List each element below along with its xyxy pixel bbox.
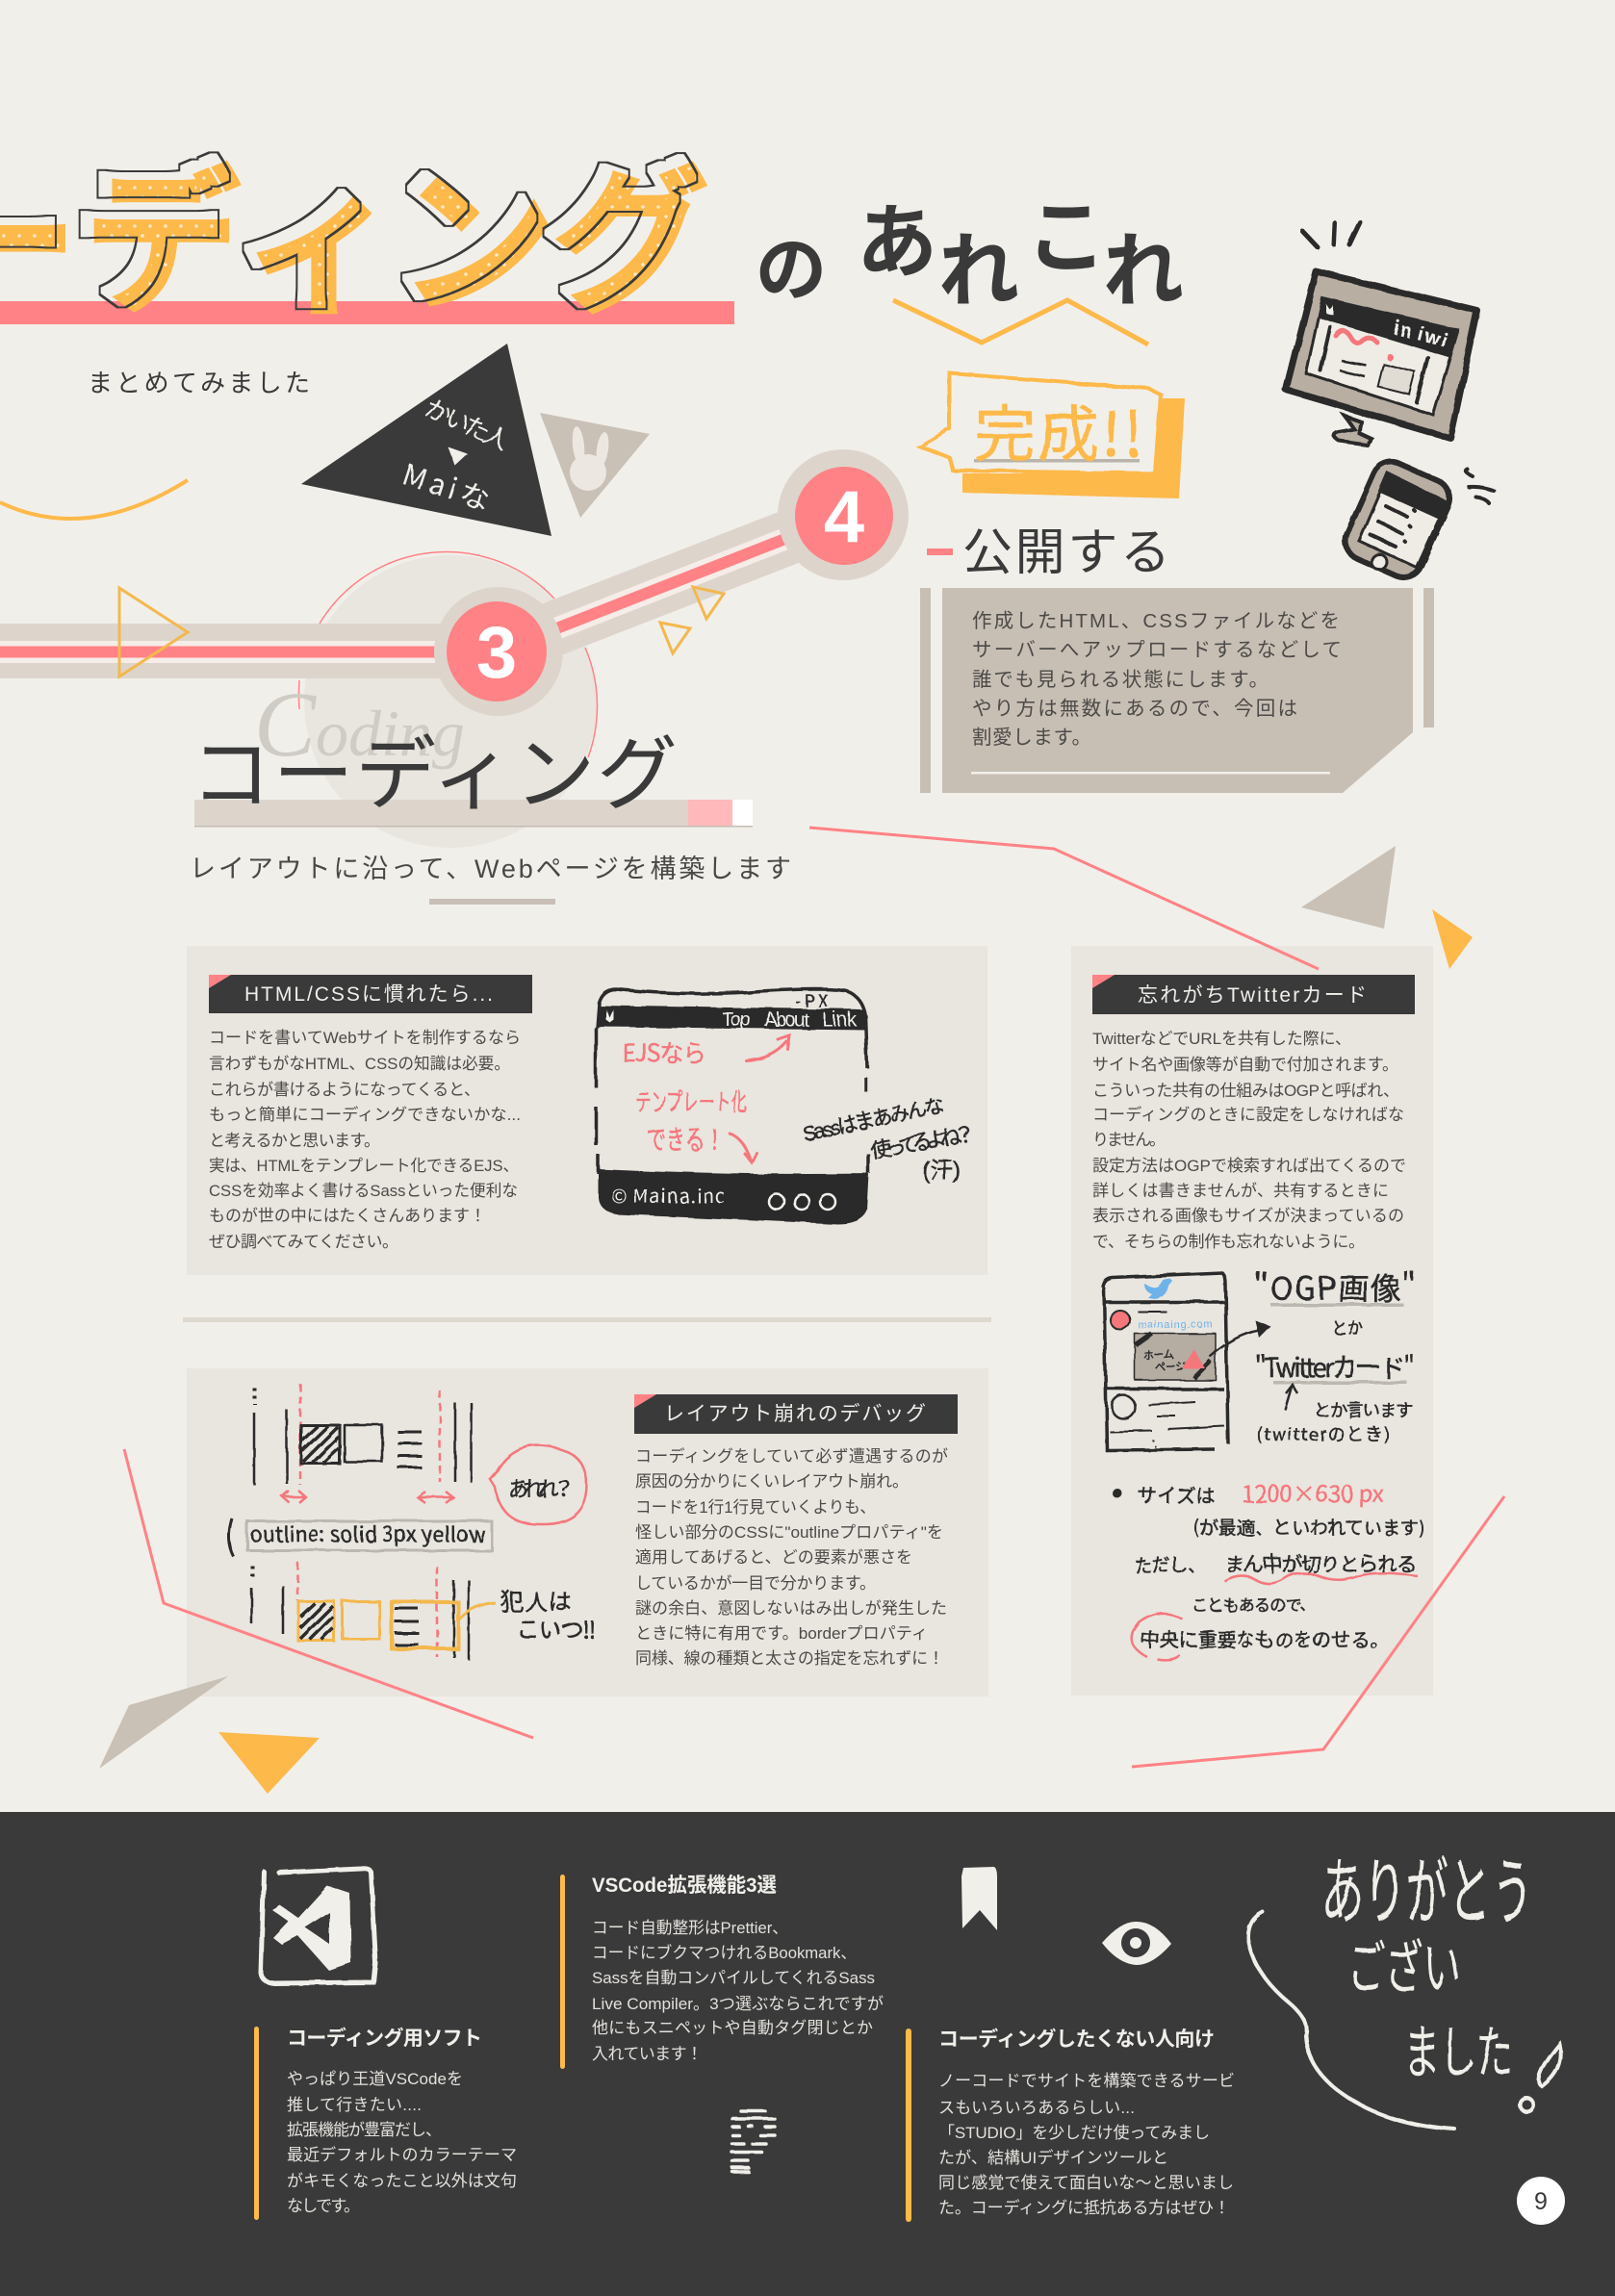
body — [938, 2072, 1235, 2217]
body text: しているかが一目で分かります。 — [635, 1574, 876, 1593]
author text: かいた人 — [421, 390, 516, 458]
card image label 2: ページ — [1155, 1359, 1187, 1374]
body — [287, 2070, 517, 2215]
body: やっぱり王道VSCodeを — [287, 2070, 463, 2088]
body: がキモくなったこと以外は文句 — [287, 2172, 517, 2190]
body text — [1092, 1030, 1406, 1251]
author text: Maiな — [397, 451, 496, 519]
are kore letters: あれこれ — [857, 173, 1184, 323]
empty block highlighted — [343, 1601, 379, 1639]
page number badge — [1517, 2177, 1565, 2225]
bottom guides — [250, 1566, 254, 1581]
outline code text: outline: solid 3px yellow — [250, 1519, 485, 1548]
cropped text: まん中が切りとられる — [1224, 1549, 1417, 1578]
card image mountain — [1182, 1349, 1205, 1368]
Coding script watermark: Coding — [254, 673, 465, 776]
wireframe nav: About — [764, 1009, 808, 1031]
body text: これらが書けるようになってくると、 — [209, 1081, 480, 1099]
body text: 同様、線の種類と太さの指定を忘れずに！ — [635, 1649, 944, 1668]
panel text: サーバーへアップロードするなどして — [972, 639, 1342, 661]
avatar — [1111, 1311, 1130, 1330]
wireframe window controls: - P X — [795, 987, 828, 1011]
note: sass: 使ってるよね？ — [869, 1121, 977, 1163]
body text: ときに特に有用です。borderプロパティ — [635, 1624, 928, 1643]
bottom pink guides — [297, 1562, 437, 1657]
header text: 忘れがちTwitterカード — [1138, 984, 1367, 1007]
however: ただし、 — [1134, 1551, 1206, 1577]
body text: と考えるかと思います。 — [209, 1132, 380, 1150]
bubble underline — [974, 459, 1140, 462]
panel text: やり方は無数にあるので、今回は — [972, 698, 1297, 720]
body text: こういった共有の仕組みはOGPと呼ばれ、 — [1092, 1082, 1399, 1100]
arrow to OGP — [1210, 1330, 1263, 1357]
sketch: twitter card — [1103, 1264, 1424, 1660]
user icon — [1112, 1395, 1135, 1418]
hatched block highlighted — [298, 1601, 334, 1641]
body: ノーコードでサイトを構築できるサービ — [938, 2072, 1235, 2090]
orange triangle top — [1432, 909, 1473, 969]
question bubble — [490, 1445, 587, 1524]
question text: あれれ？ — [507, 1472, 575, 1503]
culprit connector — [458, 1603, 496, 1620]
body text — [209, 1029, 521, 1251]
header corner — [209, 975, 231, 988]
body text: 適用してあげると、どの要素が悪さを — [635, 1548, 912, 1567]
sketch: web page wireframe — [596, 987, 977, 1224]
body text: コーディングのときに設定をしなければな — [1092, 1105, 1404, 1124]
phone screen — [1359, 473, 1447, 568]
accent bar — [560, 1875, 565, 2069]
monitor frame — [1286, 271, 1477, 438]
small underline — [429, 899, 555, 905]
dark triangle — [301, 344, 551, 536]
panel text: 作成したHTML、CSSファイルなどを — [972, 610, 1340, 632]
wireframe copyright: © Maina.inc — [611, 1181, 725, 1209]
accent bar — [254, 2027, 259, 2220]
main title: coding — [0, 111, 708, 344]
heading: コーディング用ソフト — [287, 2027, 482, 2050]
icon logo — [272, 1886, 351, 1971]
card frame — [1103, 1273, 1228, 1450]
OGP underline — [1270, 1303, 1403, 1307]
phone text lines — [1371, 506, 1415, 547]
culprit text: 犯人は — [500, 1583, 572, 1617]
twitter card underline — [1273, 1381, 1407, 1384]
panel header bar — [634, 1394, 958, 1434]
body text — [635, 1446, 948, 1668]
top layout guides — [254, 1389, 472, 1485]
body: た。コーディングに抵抗ある方はぜひ！ — [938, 2198, 1230, 2217]
name dash — [1138, 1311, 1166, 1313]
step 3 node — [434, 587, 563, 716]
body text: サイト名や画像等が自動で付加されます。 — [1092, 1056, 1398, 1074]
page number: 9 — [1534, 2188, 1548, 2215]
grey triangle bottom — [99, 1676, 228, 1769]
phone body — [1340, 456, 1455, 583]
panel background — [187, 946, 987, 1275]
twitter bird — [1144, 1279, 1172, 1299]
body text: コードを1行1行見ていくよりも、 — [635, 1498, 876, 1517]
orange triangle bottom — [218, 1732, 320, 1794]
body text: 言わずもがなHTML、CSSの知識は必要。 — [209, 1055, 510, 1073]
step 3 description: レイアウトに沿って、Webページを構築します — [190, 855, 791, 883]
monitor nav text: in iwi — [1392, 315, 1449, 352]
divider — [183, 1317, 991, 1322]
author text — [397, 390, 516, 519]
header text: レイアウト崩れのデバッグ — [664, 1403, 926, 1425]
bubble text: 完成!! — [974, 386, 1143, 474]
note: EJS: EJSなら — [622, 1034, 706, 1069]
pink ring — [1132, 1614, 1182, 1660]
note: sass: Sassはまあみんな — [801, 1094, 947, 1146]
card image corners — [1136, 1334, 1211, 1378]
panel text — [972, 610, 1342, 749]
panel: twitter card — [1071, 946, 1433, 1696]
tweet lines — [1110, 1402, 1224, 1447]
twitter card label: "Twitterカード" — [1254, 1347, 1415, 1385]
monitor attention ticks — [1303, 222, 1360, 247]
sketch: smartphone — [1340, 456, 1494, 583]
monitor bunny — [1326, 304, 1334, 316]
size value: 1200×630 px — [1242, 1475, 1384, 1509]
OGP label: "OGP画像" — [1254, 1264, 1417, 1309]
heading: coding: コーディング — [191, 729, 678, 820]
body: Sassを自動コンパイルしてくれるSass — [592, 1969, 875, 1987]
thanks dot — [1520, 2098, 1533, 2111]
icon: eye — [1102, 1922, 1171, 1965]
sketch: layout debugging — [229, 1384, 596, 1660]
thanks line 3: ました — [1403, 2006, 1513, 2090]
icon: bookmark — [961, 1867, 997, 1930]
header corner — [634, 1394, 656, 1408]
panel text: 誰でも見られる状態にします。 — [972, 669, 1269, 691]
hatched block — [301, 1425, 340, 1464]
monitor dot — [1386, 354, 1394, 360]
bracket arrow — [229, 1518, 234, 1557]
phone ticks — [1466, 470, 1494, 504]
author triangle — [301, 344, 551, 536]
pink arcs — [298, 552, 597, 757]
sketch: desktop monitor — [1286, 222, 1477, 445]
body text: TwitterなどでURLを共有した際に、 — [1092, 1030, 1351, 1048]
top pink guides — [300, 1384, 440, 1485]
accent bar — [906, 2028, 911, 2222]
monitor text lines — [1340, 361, 1367, 376]
grey triangle — [540, 413, 650, 518]
says label: とか言います — [1314, 1397, 1413, 1422]
optimal note: (が最適、といわれています) — [1193, 1514, 1424, 1540]
step 4 heading: 公開する — [962, 525, 1170, 581]
bubble shadow — [962, 398, 1185, 498]
block: vscode extensions — [560, 1875, 884, 2069]
note text: こともあるので、 — [1192, 1592, 1317, 1616]
body text: 謎の余白、意図しないはみ出しが発生した — [635, 1599, 947, 1618]
panel right strip — [1423, 588, 1434, 727]
icon: prettier lines — [732, 2111, 775, 2172]
panel header bar — [209, 975, 532, 1013]
body text: もっと簡単にコーディングできないかな... — [209, 1105, 521, 1124]
outline code box — [247, 1521, 492, 1550]
body: 「STUDIO」を少しだけ使ってみまし — [938, 2123, 1210, 2142]
thanks exclamation — [1539, 2044, 1560, 2086]
icon: vscode — [261, 1869, 375, 1983]
body text: コードを書いてWebサイトを制作するなら — [209, 1029, 521, 1047]
body: Live Compiler。3つ選ぶならこれですが — [592, 1995, 884, 2013]
body text: りません。 — [1092, 1131, 1166, 1149]
margin arrows — [282, 1491, 453, 1503]
link text: mainaing.com — [1138, 1319, 1213, 1331]
body text: ものが世の中にはたくさんあります！ — [209, 1207, 486, 1225]
body text: CSSを効率よく書けるSassといった便利な — [209, 1182, 518, 1200]
heading: VSCode拡張機能3選 — [592, 1875, 777, 1897]
body: 入れています！ — [592, 2045, 703, 2063]
handwritten thanks — [1248, 1833, 1560, 2130]
bunny triangle — [540, 413, 650, 518]
bullet — [1113, 1489, 1122, 1498]
panel body — [942, 588, 1413, 793]
panel: html css — [187, 946, 987, 1275]
body text: 表示される画像もサイズが決まっているの — [1092, 1207, 1404, 1225]
body: コード自動整形はPrettier、 — [592, 1919, 788, 1937]
block: coding software — [254, 2027, 517, 2220]
thanks bracket curve — [1248, 1912, 1455, 2130]
arrow head — [1255, 1320, 1270, 1338]
small outlined triangle 2 — [660, 623, 690, 653]
wireframe outline — [596, 989, 869, 1174]
step 4 description panel — [920, 588, 1434, 793]
body: 推して行きたい.... — [287, 2096, 422, 2114]
wavy underline — [1225, 1572, 1418, 1584]
body text: ぜひ調べてみてください。 — [209, 1233, 398, 1251]
panel left strip — [920, 588, 931, 793]
wireframe bunny — [606, 1009, 614, 1023]
body: 拡張機能が豊富だし、 — [287, 2121, 442, 2139]
decorative line lower left — [124, 1449, 533, 1738]
grey triangle top — [1301, 846, 1396, 929]
body text: 詳しくは書きませんが、共有するときに — [1092, 1182, 1389, 1200]
icon: bunny — [570, 425, 610, 491]
panel rule — [971, 772, 1330, 774]
culprit block — [392, 1602, 458, 1648]
step number 4: 4 — [824, 476, 864, 558]
panel background — [187, 1368, 988, 1696]
orange arc — [0, 480, 188, 519]
thanks line 2: ござい — [1347, 1922, 1461, 2005]
empty block — [345, 1425, 382, 1462]
bubble outline — [920, 373, 1161, 473]
center text: 中央に重要なものをのせる。 — [1141, 1624, 1389, 1652]
card image — [1135, 1334, 1216, 1380]
pale circle behind step 3 — [298, 552, 597, 848]
title continuation: no arekore — [756, 173, 1184, 323]
decorative line top right — [809, 828, 1319, 969]
arrow to header — [746, 1035, 789, 1060]
body: 最近デフォルトのカラーテーマ — [287, 2145, 517, 2164]
block: no-code — [906, 2028, 1235, 2222]
subtitle: matomete mimashita: まとめてみました — [88, 369, 310, 397]
body text: 原因の分かりにくいレイアウト崩れ。 — [635, 1472, 909, 1491]
footer background — [0, 1812, 1615, 2296]
monitor stand — [1334, 416, 1371, 445]
card image label: ホーム — [1143, 1347, 1175, 1363]
heading underline bar — [194, 800, 753, 828]
particle no: の — [756, 213, 827, 316]
monitor screen — [1306, 298, 1458, 415]
wireframe nav: Top — [722, 1009, 751, 1031]
heading: コーディングしたくない人向け — [938, 2028, 1215, 2051]
culprit text 2: こいつ!! — [517, 1611, 596, 1645]
step 4 dash — [927, 548, 953, 555]
panel text: 割愛します。 — [972, 727, 1091, 749]
panel background — [1071, 946, 1433, 1696]
size label: サイズは — [1138, 1480, 1215, 1508]
wireframe nav: Link — [822, 1009, 858, 1031]
body text: で、そちらの制作も忘れないように。 — [1092, 1233, 1365, 1251]
panel: layout debug — [187, 1368, 988, 1696]
step line: horizontal band and diagonal band — [0, 516, 844, 652]
step number 3: 3 — [476, 612, 517, 694]
bottom layout lines — [251, 1580, 469, 1660]
body text: 怪しい部分のCSSに"outlineプロパティ"を — [635, 1523, 943, 1542]
small outlined triangle 1 — [693, 587, 724, 619]
header text: HTML/CSSに慣れたら... — [244, 983, 493, 1006]
arrow to footer — [730, 1134, 756, 1162]
body: 他にもスニペットや自動タグ閉じとか — [592, 2019, 873, 2037]
wireframe footer — [599, 1169, 869, 1224]
phone button — [1371, 554, 1387, 570]
speech bubble: kansei — [920, 373, 1185, 498]
body: たが、結構UIデザインツールと — [938, 2148, 1168, 2167]
body text: コーディングをしていて必ず遭遇するのが — [635, 1446, 948, 1466]
yellow zigzag — [893, 300, 1148, 344]
up arrow — [1285, 1385, 1297, 1410]
note: dekiru: できる！ — [647, 1119, 724, 1158]
body — [592, 1919, 884, 2063]
wireframe social icons — [769, 1194, 835, 1210]
monitor image — [1378, 364, 1415, 395]
twitter no toki: (twitterのとき) — [1257, 1421, 1390, 1446]
step 4 node — [778, 449, 909, 580]
big outlined triangle — [119, 588, 188, 676]
phone header — [1380, 473, 1447, 520]
note: sass — [801, 1094, 977, 1184]
note: sass: (汗) — [922, 1158, 961, 1184]
decorative line lower right — [1132, 1496, 1504, 1767]
body: スもいろいろあるらしい... — [938, 2099, 1135, 2117]
monitor header — [1318, 298, 1458, 358]
body text: 実は、HTMLをテンプレート化できるEJS、 — [209, 1157, 519, 1175]
culprit lines — [395, 1609, 419, 1645]
note: template: テンプレート化 — [635, 1084, 747, 1118]
body: 同じ感覚で使えて面白いな～と思いまし — [938, 2173, 1234, 2192]
monitor squiggle — [1336, 331, 1377, 344]
body: コードにブクマつけれるBookmark、 — [592, 1943, 857, 1962]
monitor columns — [1320, 327, 1428, 402]
title underline bar — [0, 301, 734, 324]
wireframe nav — [722, 1009, 858, 1031]
header corner — [1092, 975, 1115, 988]
body text: 設定方法はOGPで検索すれば出てくるので — [1092, 1157, 1406, 1175]
toka: とか — [1331, 1314, 1364, 1339]
wireframe header — [597, 1006, 865, 1030]
text lines — [397, 1432, 422, 1467]
outline triangles — [119, 587, 724, 676]
icon frame — [261, 1869, 375, 1983]
body: なしです。 — [287, 2197, 360, 2215]
panel header bar — [1092, 975, 1415, 1014]
